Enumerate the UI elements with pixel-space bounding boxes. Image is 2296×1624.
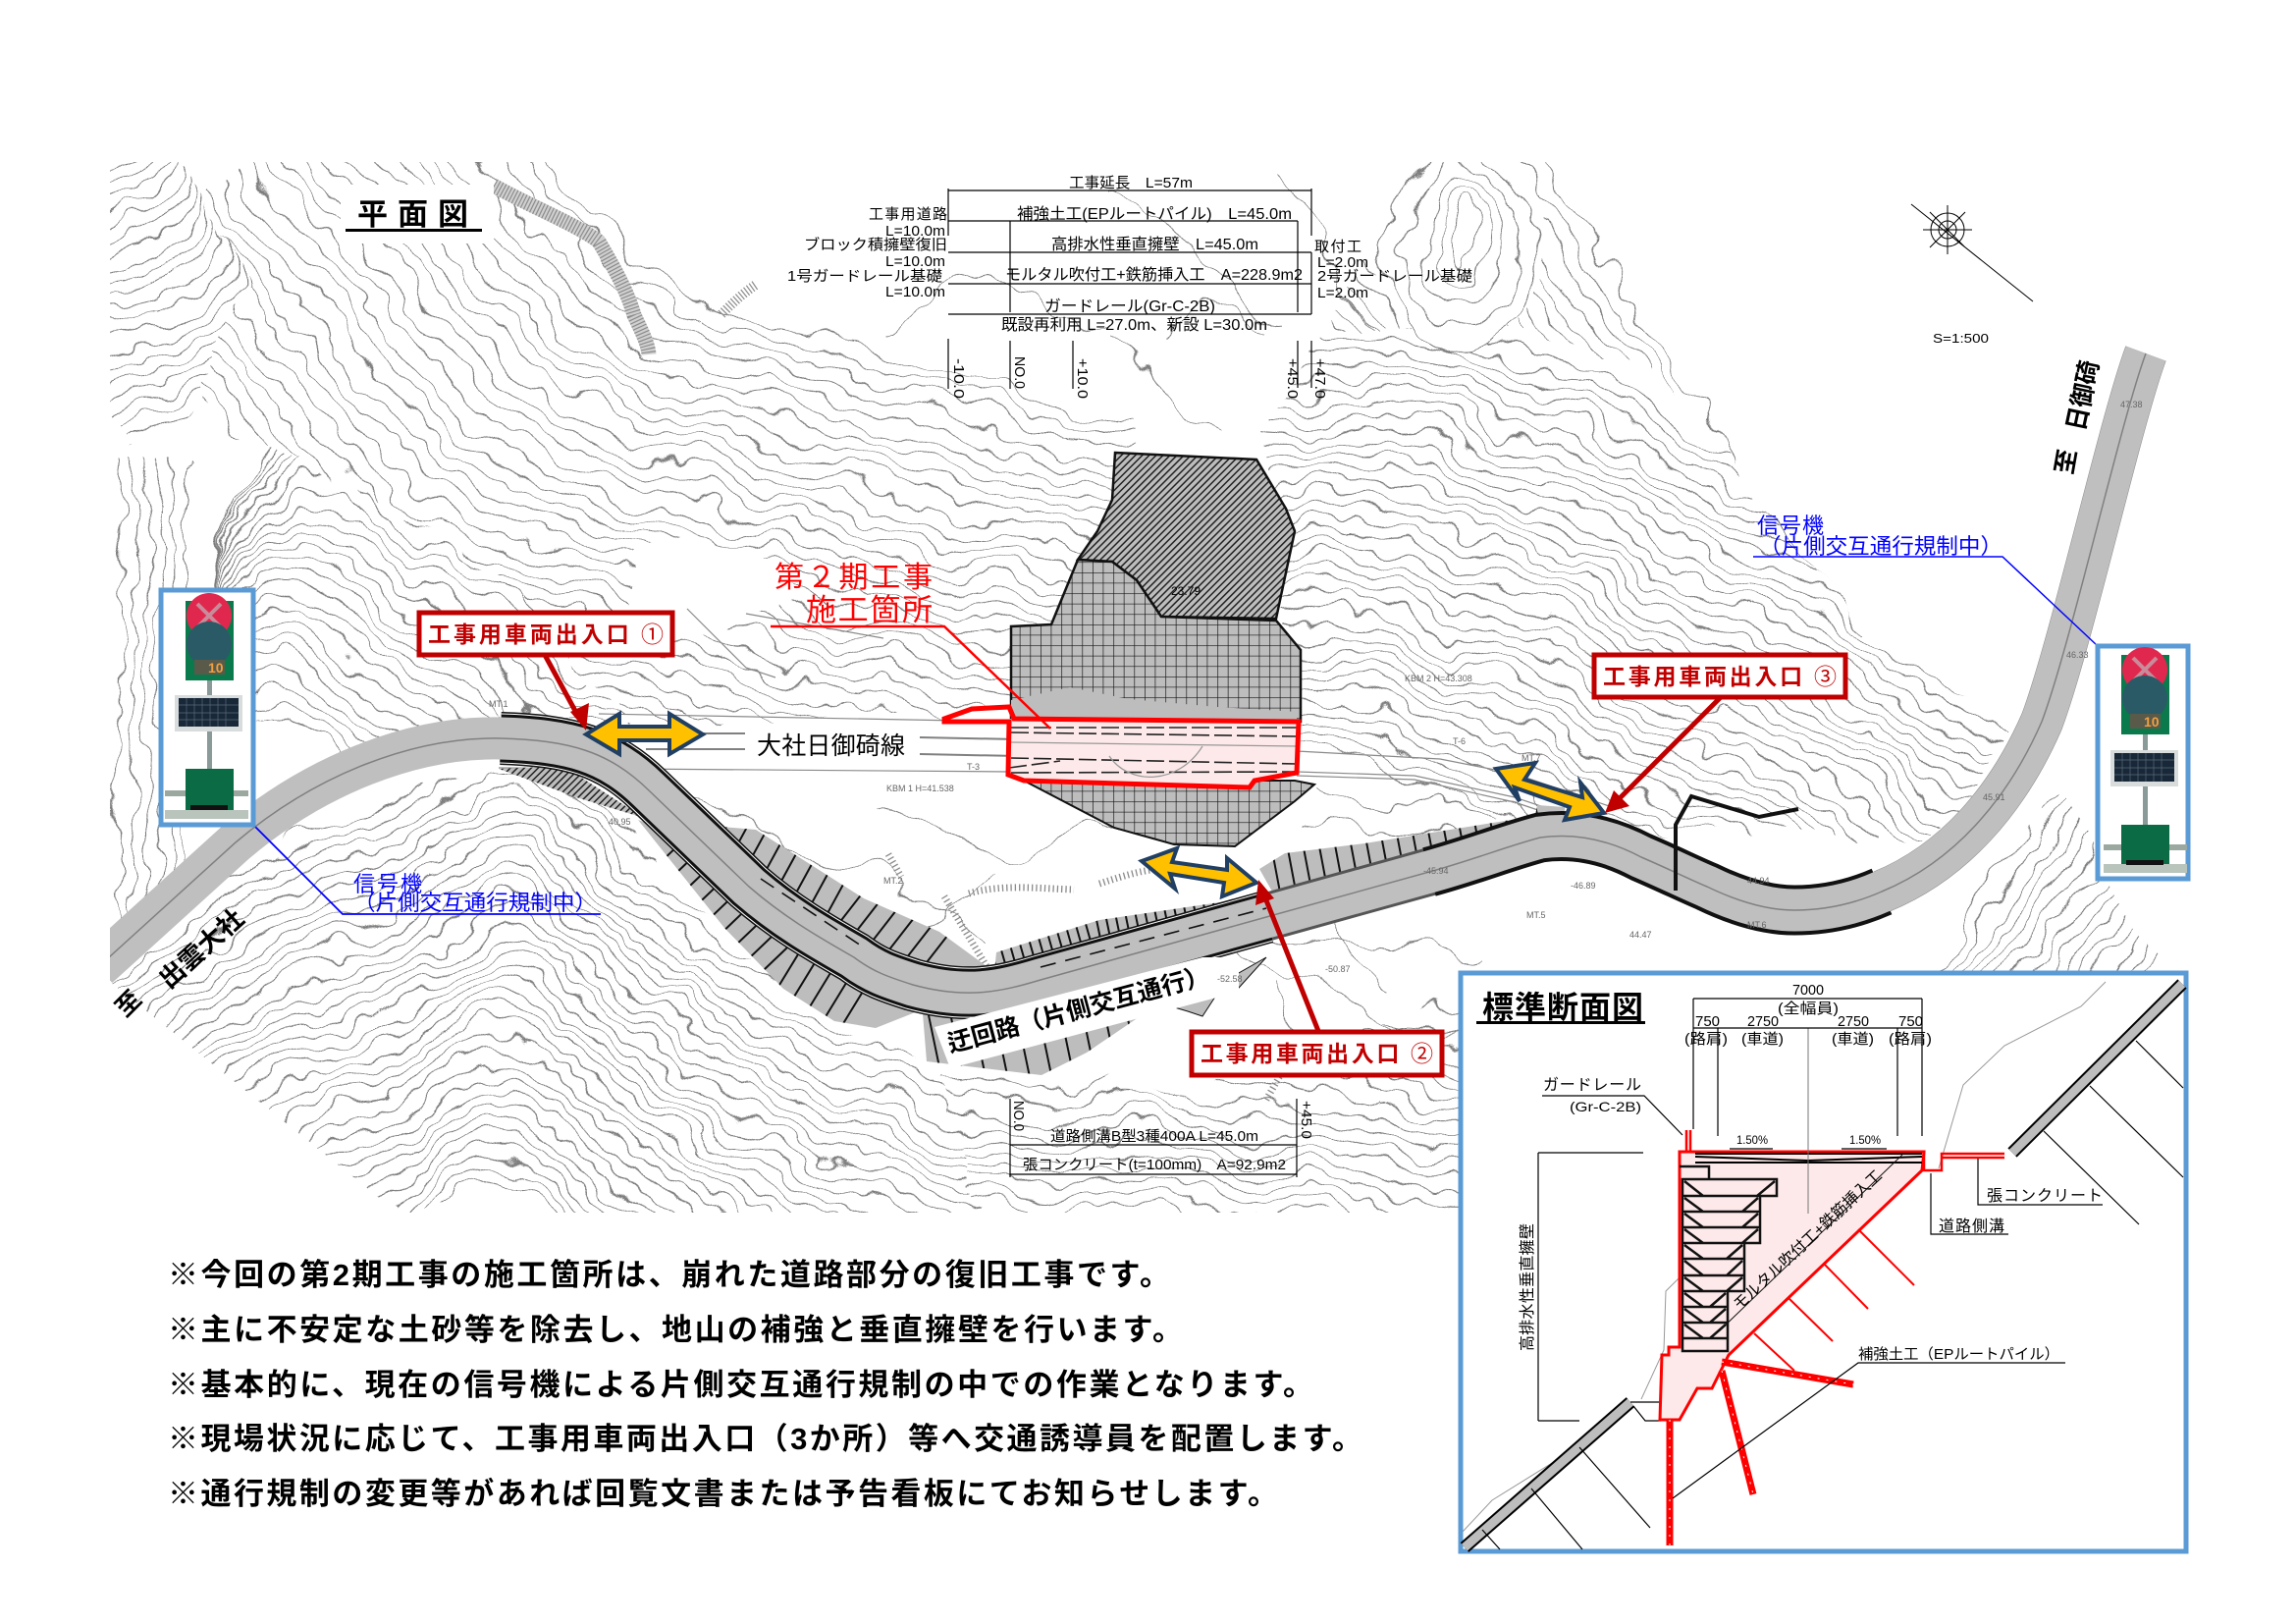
small survey labels: MT.1 (489, 699, 508, 709)
notes text block: ※主に不安定な土砂等を除去し、地山の補強と垂直擁壁を行います。 (168, 1313, 1183, 1347)
dimension table bottom: NO.0 (1010, 1101, 1027, 1131)
dimension table top: NO.0 (1011, 356, 1028, 389)
hatched slope: excavation upper (1078, 453, 1295, 619)
small retaining wall marks near road (888, 854, 1286, 1100)
white flat zones over the contours (864, 147, 1394, 334)
small survey labels: -52.58 (1217, 974, 1243, 984)
solar panel (175, 680, 242, 774)
small survey labels: KBM 2 H=43.308 (1405, 674, 1472, 683)
small embankment pieces (1171, 957, 1266, 1016)
notes text block: ※通行規制の変更等があれば回覧文書または予告看板にてお知らせします。 (168, 1477, 1278, 1511)
small survey labels: -45.94 (1423, 866, 1449, 876)
callout: signal left (253, 825, 601, 915)
work zone: pink area with red outline (944, 687, 1299, 787)
callout: entrance 3 (1594, 655, 1845, 813)
label: side ditch: 道路側溝 (1939, 1218, 2004, 1235)
signal head: 10 (208, 660, 224, 676)
diagonal guide (1719, 1155, 1902, 1331)
nails thin (1754, 1229, 1914, 1371)
callout: phase 2 work site: 施工箇所 (806, 593, 933, 627)
guardrail post (1686, 1130, 1690, 1152)
notes text block: ※基本的に、現在の信号機による片側交互通行規制の中での作業となります。 (168, 1368, 1313, 1402)
dimension labels: (路肩) (1889, 1031, 1932, 1048)
signal head: 10 (2144, 714, 2160, 730)
arrow: site entrance 3 (1496, 763, 1604, 820)
small survey labels: -50.87 (1325, 964, 1351, 974)
dimension labels: 7000 (1792, 982, 1824, 999)
direction label: 至 日御碕: 至 (2051, 448, 2082, 476)
arrow: site entrance 2 (1142, 848, 1256, 896)
notes text block: ※現場状況に応じて、工事用車両出入口（3か所）等へ交通誘導員を配置します。 (168, 1422, 1362, 1456)
small survey labels: T-3 (967, 762, 980, 772)
existing road lines (499, 609, 1615, 828)
callout: phase 2 work site (771, 562, 1050, 729)
label: guardrail: (Gr-C-2B) (1570, 1099, 1641, 1114)
dimension table top (787, 175, 1472, 399)
small survey labels: -46.89 (1571, 881, 1596, 891)
white label band (934, 957, 1239, 1068)
ground lines (1463, 982, 2106, 1532)
icon: north compass (1911, 204, 2033, 301)
dimension table top: +10.0 (1074, 358, 1091, 399)
callout: signal right: （片側交互通行規制中） (1759, 534, 2002, 559)
dimension table top: 1号ガードレール基礎 (787, 268, 942, 285)
dimension table top: 高排水性垂直擁壁 L=45.0m (1051, 236, 1258, 253)
small survey labels: 47.38 (2120, 400, 2143, 409)
dimension table top: L=10.0m (885, 284, 945, 300)
dimension labels: 1.50% (1849, 1133, 1881, 1147)
solar panel (2110, 734, 2178, 828)
direction label: 至 日御碕 (2051, 358, 2105, 476)
title: 標準断面図: 標準断面図 (1482, 990, 1643, 1025)
dimension table top: 補強土工(EPルートパイル) L=45.0m (1017, 205, 1292, 223)
dimension labels: 1.50% (1736, 1133, 1768, 1147)
cut slope band centre (995, 901, 1221, 964)
callout: signal left: （片側交互通行規制中） (353, 891, 597, 915)
grid slope: upper (1011, 560, 1301, 722)
dimension table top: 既設再利用 L=27.0m、新設 L=30.0m (1001, 316, 1267, 334)
dimension table top: -10.0 (950, 358, 967, 399)
signal head (2121, 647, 2169, 734)
dimension table top: モルタル吹付工+鉄筋挿入工 A=228.9m2 (1005, 266, 1303, 284)
dimension table bottom: 道路側溝B型3種400A L=45.0m (1050, 1128, 1258, 1145)
label: side ditch (1931, 1173, 2008, 1235)
label: 迂回路: 迂回路（片側交互通行） (944, 962, 1212, 1058)
dimension table bottom: 張コンクリート(t=100mm) A=92.9m2 (1023, 1157, 1286, 1173)
slope right (2012, 984, 2183, 1224)
slope left (1465, 1402, 1661, 1549)
grid slope: lower (1024, 781, 1314, 846)
mortar body (1660, 1152, 1924, 1420)
label: paved concrete: 張コンクリート (1987, 1187, 2103, 1205)
cut slope band right (1259, 805, 1565, 891)
dimension table top: L=2.0m (1317, 254, 1368, 271)
direction label: 至 出雲大社: 出雲大社 (153, 903, 249, 994)
signal head (186, 593, 234, 680)
label: reinforcement: 補強土工（EPルートパイル） (1858, 1346, 2059, 1363)
dimension table top: 工事用道路 (869, 206, 947, 223)
small survey labels: MT.6 (1747, 920, 1767, 930)
dimension table bottom (1010, 1099, 1314, 1177)
dimension labels: (全幅員) (1778, 1001, 1839, 1017)
dimension table top: 2号ガードレール基礎 (1317, 268, 1472, 285)
callout: entrance 3: 工事用車両出入口 ③ (1603, 664, 1837, 689)
label: 23.79: 23.79 (1171, 584, 1201, 598)
pavement (1695, 1154, 1922, 1163)
panel: plan view contour map (110, 162, 2008, 1213)
dimension table top: +47.0 (1311, 358, 1328, 399)
notes text block (168, 1258, 1362, 1511)
small survey labels: KBM 1 H=41.538 (886, 784, 954, 793)
centre line (1807, 1028, 1809, 1214)
small survey labels: MT.5 (1526, 910, 1546, 920)
sparse terrain (883, 275, 1109, 334)
label: mortar: モルタル吹付工+鉄筋挿入工 (1730, 1166, 1886, 1314)
dimension labels: (車道) (1832, 1031, 1874, 1048)
dimension labels (1684, 982, 1932, 1147)
title: 平面図 (341, 185, 494, 244)
dimension table top: +45.0 (1284, 358, 1301, 399)
reinforcement piles (1670, 1362, 1853, 1545)
callout: entrance 1 (419, 613, 672, 731)
dimension table top: L=10.0m (885, 223, 945, 240)
callout: entrance 2 (1192, 880, 1442, 1075)
bypass embankment (923, 1014, 1137, 1075)
dimension lines (1538, 999, 1922, 1421)
road (98, 353, 2146, 993)
fence lines (1676, 796, 1798, 891)
notes text block: ※今回の第2期工事の施工箇所は、崩れた道路部分の復旧工事です。 (168, 1258, 1170, 1292)
dimension labels: (車道) (1741, 1031, 1784, 1048)
small survey labels: 40.95 (609, 817, 631, 827)
label: high-drainage vertical wall: 高排水性垂直擁壁 (1519, 1223, 1536, 1351)
dimension labels: 750 (1695, 1013, 1720, 1030)
title: 平面図: 平面図 (357, 197, 468, 232)
callout: entrance 2: 工事用車両出入口 ② (1201, 1041, 1433, 1066)
panel: traffic signal right (2098, 646, 2188, 879)
small survey labels: 44.94 (1747, 876, 1770, 886)
contour patch: lower right of road (1940, 795, 2158, 970)
label: guardrail: ガードレール (1543, 1076, 1641, 1094)
dimension table top: L=10.0m (885, 253, 945, 270)
direction label: 至 日御碕: 日御碕 (2061, 358, 2105, 433)
cut slope band lower left (628, 815, 923, 1031)
small survey labels: 45.91 (1983, 792, 2005, 802)
label: reinforcement (1673, 1346, 2065, 1498)
steep knob (721, 285, 756, 314)
dimension labels: 2750 (1838, 1013, 1869, 1030)
small survey labels: 44.47 (1629, 930, 1652, 940)
small survey labels: MT.7 (1522, 753, 1541, 763)
callout: signal right: 信号機 (1757, 514, 1824, 538)
callout: signal left: 信号機 (353, 872, 422, 896)
side ditch and paved concrete (1924, 1152, 2004, 1170)
direction label: 至 出雲大社 (110, 903, 249, 1022)
controller box (2104, 825, 2187, 873)
panel: traffic signal left (161, 590, 253, 825)
road name: 大社日御碕線: 大社日御碕線 (757, 732, 905, 760)
direction label: 至 出雲大社: 至 (110, 986, 147, 1022)
controller box (165, 769, 248, 819)
small survey labels (489, 400, 2143, 984)
retaining wall (1680, 1166, 1777, 1351)
small survey labels: MT.2 (883, 876, 903, 886)
callout: entrance 1: 工事用車両出入口 ① (428, 622, 664, 647)
cut slope band upper left (724, 827, 986, 966)
dense steep ridge (494, 186, 649, 354)
panel: standard cross section (1461, 973, 2186, 1551)
dimension table top: L=2.0m (1317, 285, 1368, 301)
hatched small slope (499, 766, 644, 818)
label: paved concrete (1978, 1159, 2103, 1205)
dimension table top: ガードレール(Gr-C-2B) (1044, 298, 1215, 315)
dimension table top: ブロック積擁壁復旧 (804, 236, 947, 253)
dimension labels: 2750 (1747, 1013, 1779, 1030)
scale label: S=1:500 (1933, 331, 1989, 346)
dimension table top: 取付工 (1314, 239, 1362, 255)
dimension labels: (路肩) (1684, 1031, 1728, 1048)
dimension labels: 750 (1898, 1013, 1923, 1030)
small survey labels: 46.33 (2066, 650, 2089, 660)
callout: phase 2 work site: 第２期工事 (774, 562, 933, 594)
label: guardrail (1542, 1076, 1682, 1135)
small survey labels: T-6 (1453, 736, 1466, 746)
arrow: site entrance 1 (586, 714, 703, 754)
callout: signal right (1753, 514, 2098, 646)
dimension table bottom: +45.0 (1298, 1101, 1314, 1139)
dimension table top: 工事延長 L=57m (1069, 175, 1193, 191)
